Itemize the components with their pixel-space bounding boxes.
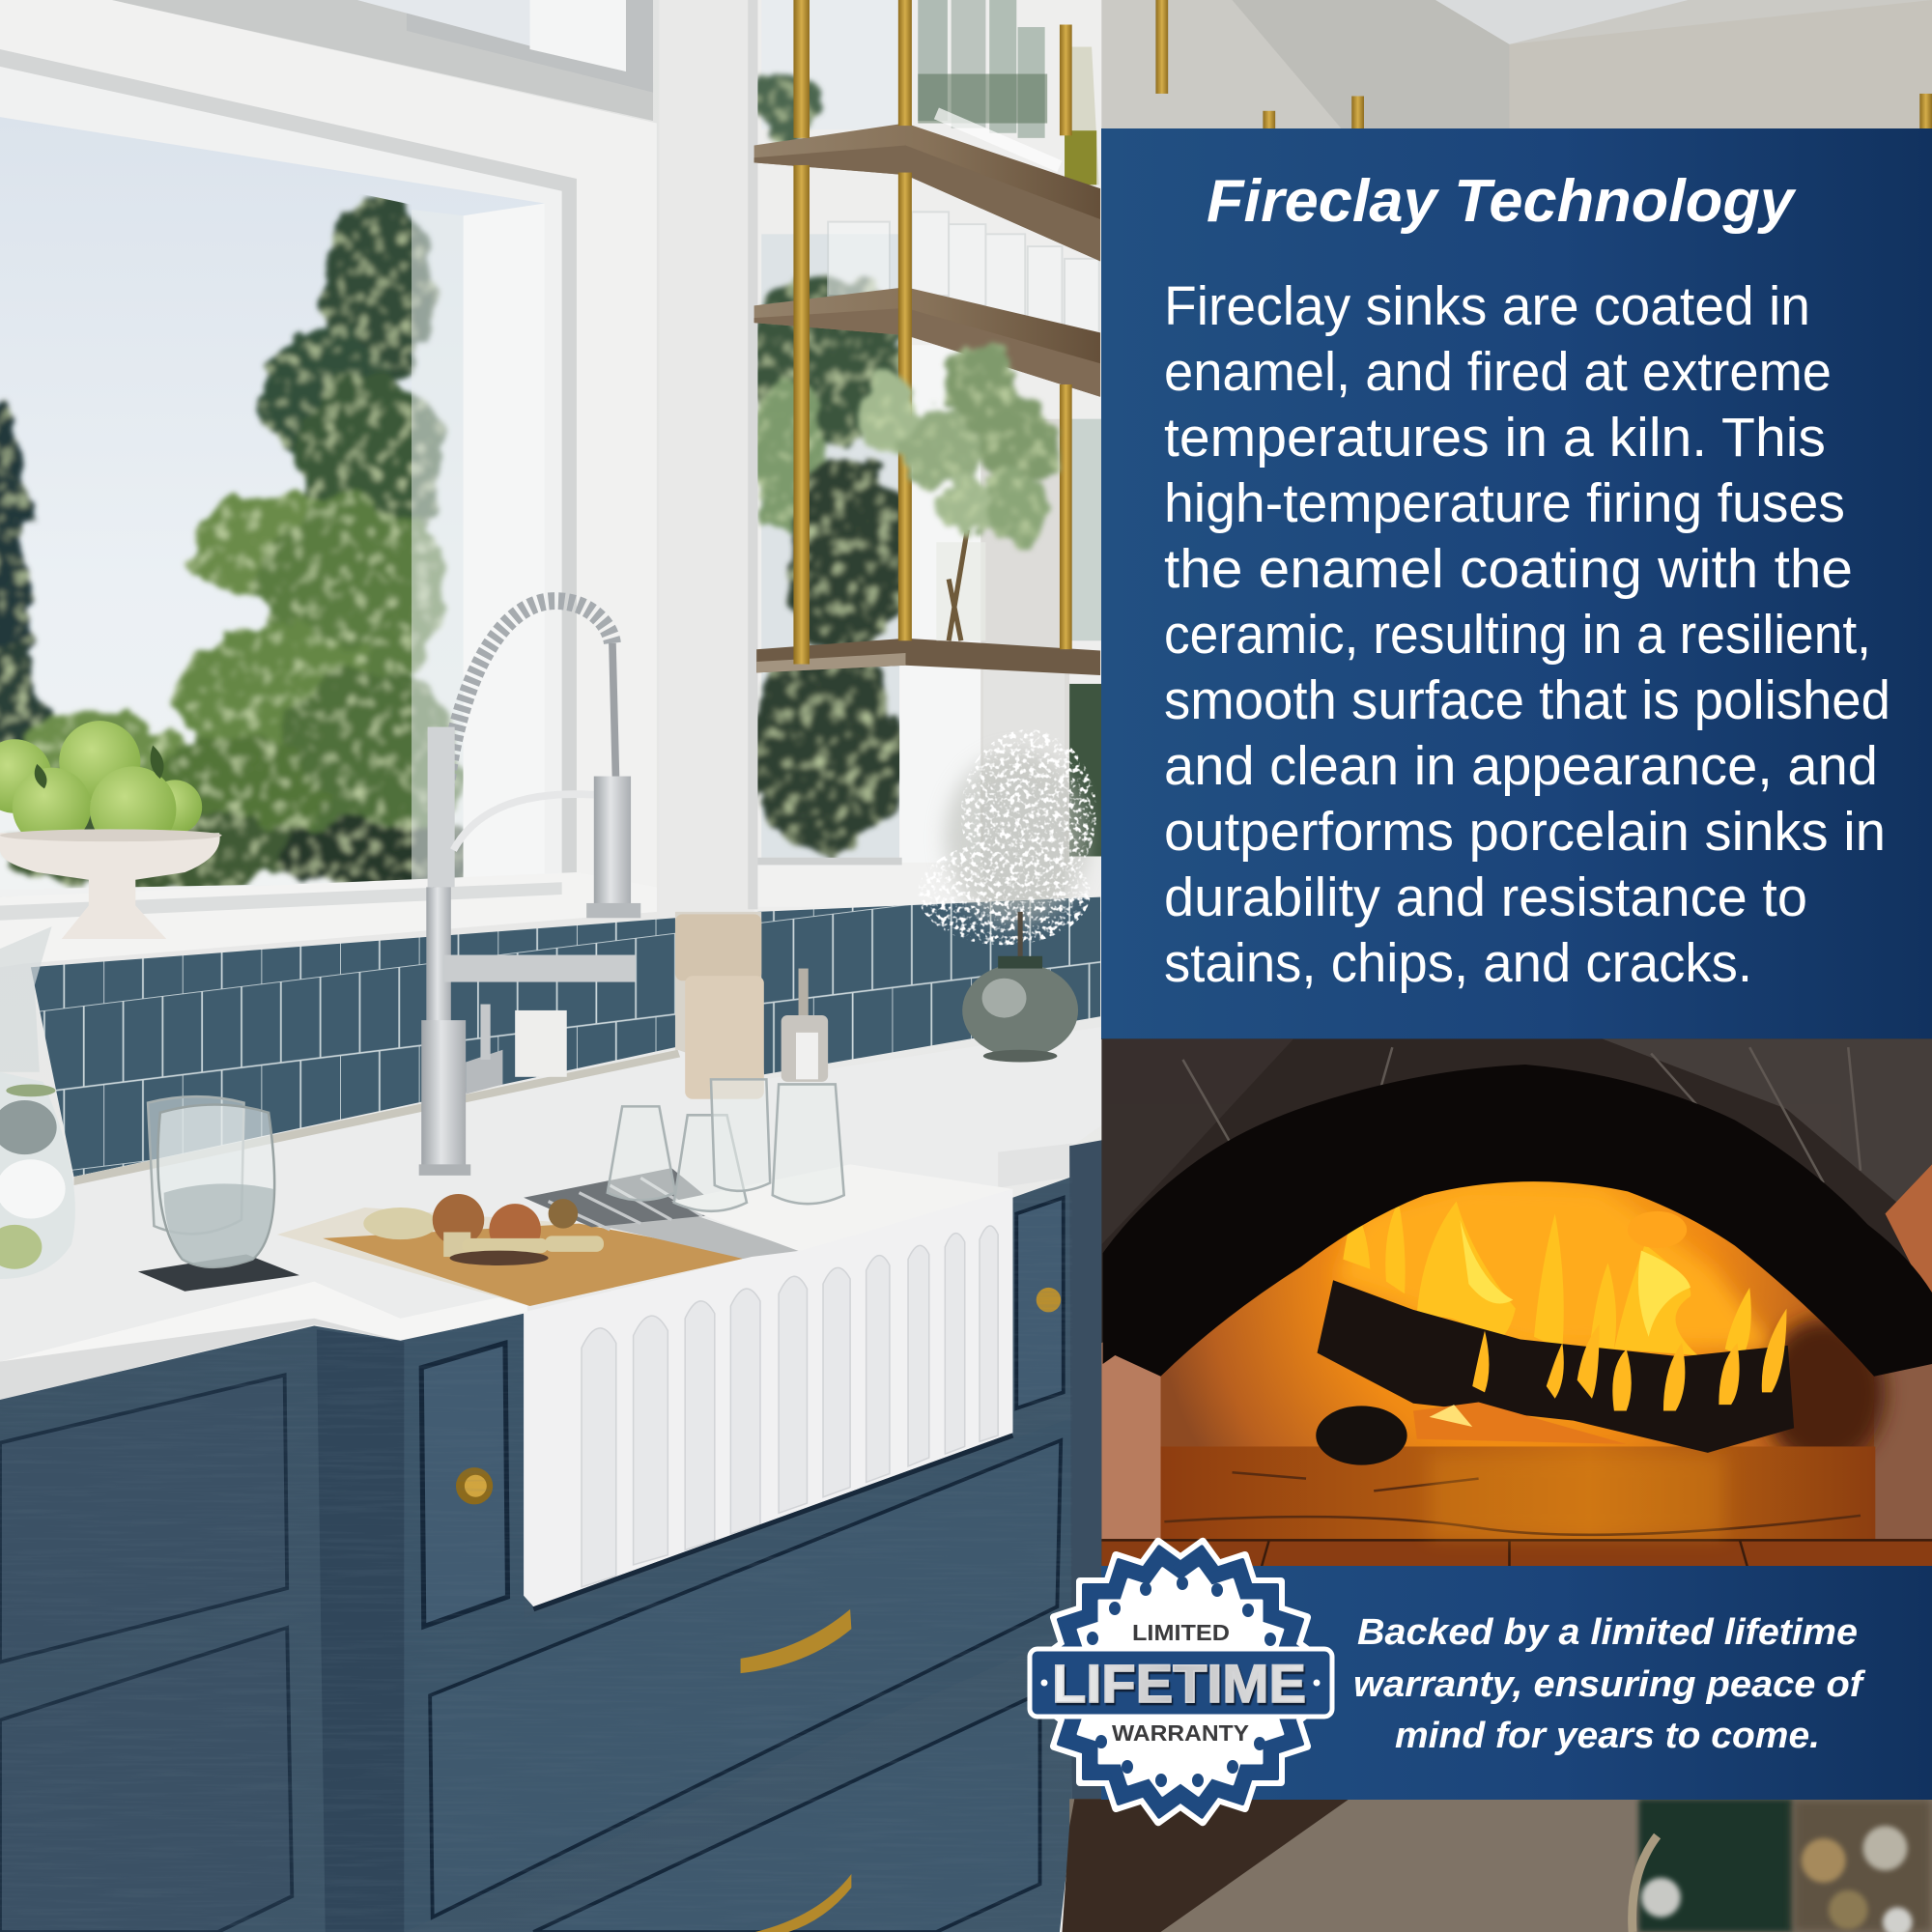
body text block: stains, chips, and cracks.: [1164, 932, 1752, 993]
embers and small flames: [1413, 1309, 1786, 1444]
brass shelf rods: [793, 0, 1072, 664]
body text block: Fireclay sinks are coated in: [1164, 275, 1810, 336]
badge ribbon: [1030, 1649, 1332, 1717]
glasses and bottles on shelves: [828, 0, 1099, 340]
warranty text: [1353, 1612, 1866, 1756]
sink front flutes: [582, 1226, 998, 1587]
heading: Fireclay Technology: Fireclay Technology: [1207, 168, 1798, 235]
body text block: smooth surface that is polished: [1164, 669, 1890, 730]
badge word: LIFETIME: LIFETIME: [1052, 1653, 1306, 1714]
lower drawer handle: [755, 1874, 851, 1932]
ceramic mugs: [675, 914, 764, 1099]
badge word: LIMITED: LIMITED: [1132, 1620, 1230, 1645]
black soot arch: [1103, 1065, 1932, 1377]
soap dispenser: [781, 969, 828, 1082]
backsplash tiles: [31, 897, 1100, 1177]
pillar front with inset panel: [404, 1314, 524, 1663]
floor, rug and blurred foreground objects: [1062, 1799, 1932, 1932]
right window with trees: [746, 0, 1101, 912]
upper drawer: [404, 1418, 1070, 1932]
blurred trees through window: [0, 197, 487, 891]
body text block: the enamel coating with the: [1164, 538, 1853, 599]
green apples in marble bowl: [0, 721, 222, 939]
switch plate: [515, 1010, 567, 1077]
upper drawer handle: [741, 1609, 851, 1673]
badge outer white star: [1040, 1542, 1321, 1822]
body text block: outperforms porcelain sinks in: [1164, 801, 1886, 862]
brass knob left: [456, 1467, 493, 1504]
badge word: WARRANTY: WARRANTY: [1112, 1720, 1249, 1746]
badge: limited lifetime warranty: [1030, 1542, 1332, 1822]
body text block: enamel, and fired at extreme: [1164, 341, 1832, 402]
right narrow panel: [1016, 1198, 1064, 1408]
brass knob right: [1037, 1288, 1061, 1312]
lower drawer: [533, 1693, 1040, 1932]
glass pitcher: [0, 926, 75, 1279]
body text block: high-temperature firing fuses: [1164, 472, 1845, 533]
body text block: [1164, 275, 1890, 993]
wall pillar between windows: [659, 0, 755, 918]
badge ribbon dots: [1041, 1679, 1320, 1687]
main window and frame: [0, 0, 657, 967]
badge blue star: [1045, 1547, 1316, 1817]
wooden floating shelves: [754, 124, 1100, 675]
burning log: [1318, 1280, 1794, 1453]
blue base cabinets: [0, 1140, 1293, 1932]
smoked glass vase: [962, 956, 1078, 1062]
panel: warranty message: [1101, 1566, 1932, 1800]
badge inner white star: [1067, 1569, 1293, 1795]
mushrooms on board: [363, 1194, 604, 1265]
panel: fireclay description: [1101, 128, 1932, 1039]
body text block: temperatures in a kiln. This: [1164, 407, 1826, 468]
photo: wood-fired kiln with flames: [1101, 1038, 1932, 1566]
left cabinet door upper: [0, 1375, 287, 1662]
farmhouse sink and cutting board: [277, 1164, 1012, 1609]
marble countertop: [0, 1026, 1104, 1400]
warranty text: warranty, ensuring peace of: [1353, 1664, 1866, 1705]
water glasses on coaster: [138, 1096, 299, 1292]
upside-down drinking glasses: [608, 1079, 844, 1211]
body text block: durability and resistance to: [1164, 867, 1807, 927]
hanging green plant: [855, 346, 1054, 640]
ceiling and beams: [1060, 0, 1932, 130]
wood grain overlay: [0, 1177, 1072, 1932]
warranty text: mind for years to come.: [1395, 1716, 1820, 1756]
left cabinet door lower: [0, 1628, 292, 1932]
white flower arrangement: [918, 729, 1096, 974]
flames behind log: [1337, 1185, 1775, 1355]
badge dots: [1087, 1577, 1276, 1787]
body text block: ceramic, resulting in a resilient,: [1164, 604, 1871, 665]
body text block: and clean in appearance, and: [1164, 735, 1878, 796]
warranty text: Backed by a limited lifetime: [1357, 1612, 1858, 1653]
faucet: [419, 601, 640, 1176]
